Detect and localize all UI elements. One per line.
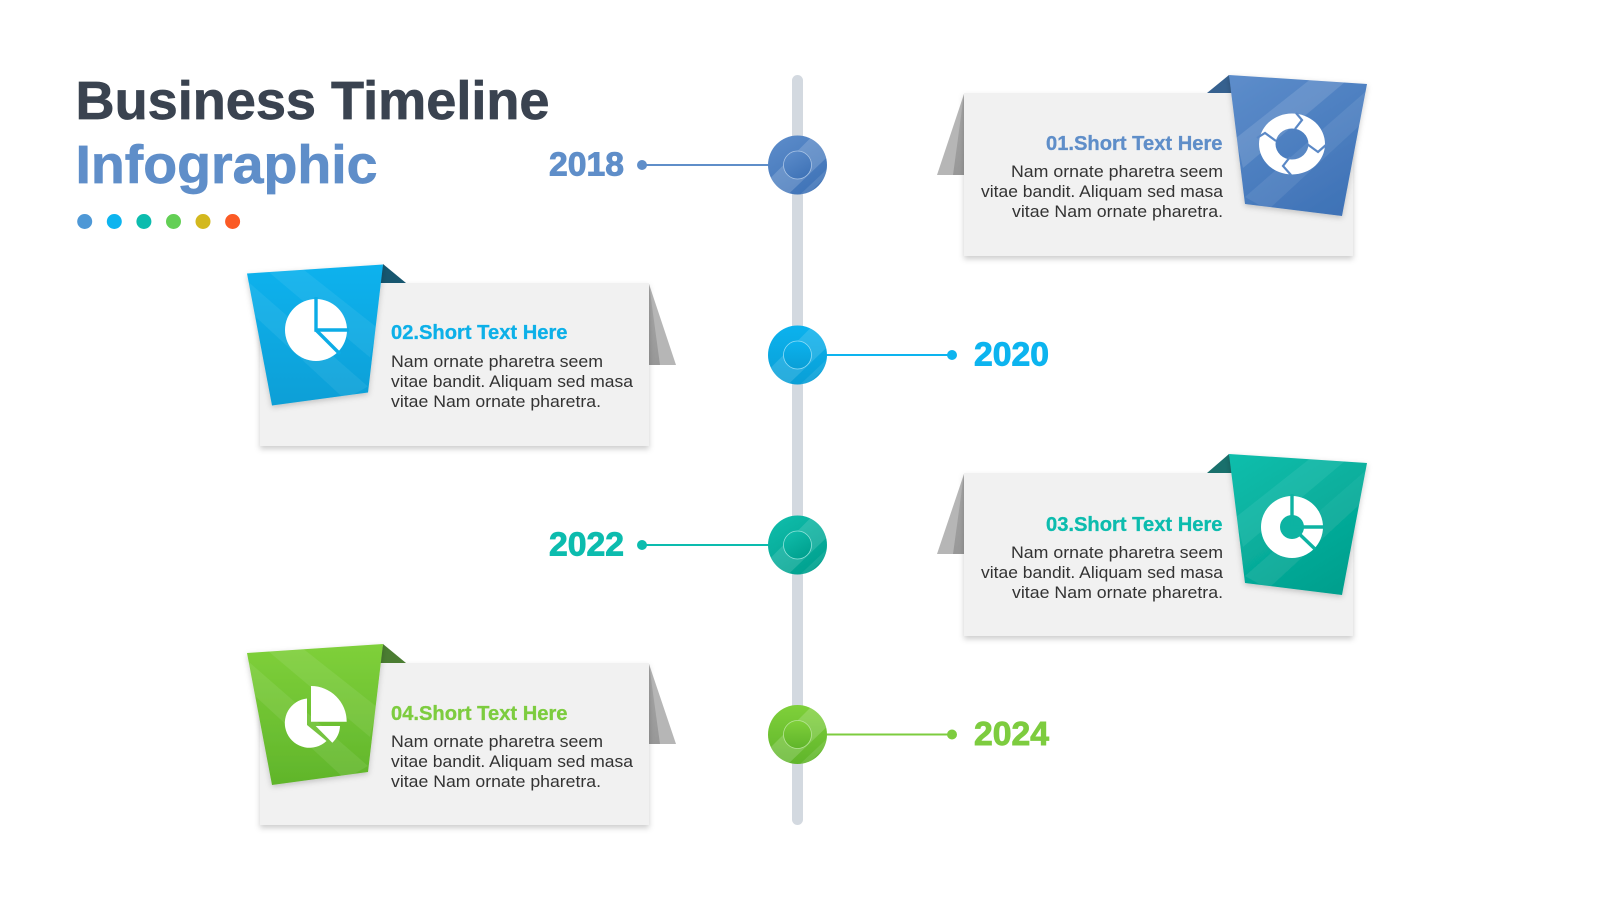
card background 02 <box>260 283 649 446</box>
year 2018 <box>550 136 827 194</box>
body text 01: Nam ornate pharetra seem <box>1011 162 1223 181</box>
panel: card 03 <box>937 454 1372 636</box>
icon: donut chart <box>1261 494 1325 558</box>
tag 04 <box>241 644 383 785</box>
tag fold 04 <box>380 644 406 663</box>
node 2020 <box>768 326 827 384</box>
tag fold 01 <box>1207 75 1233 93</box>
connector 2024 <box>825 730 957 740</box>
body text 02: Nam ornate pharetra seem <box>391 352 603 371</box>
label 2022: 2022 <box>549 526 624 562</box>
node 2024 <box>768 705 827 764</box>
connector 2022 <box>637 540 770 550</box>
connector 2020 <box>825 350 957 360</box>
colour dots <box>77 214 240 229</box>
body text 03 <box>981 543 1224 602</box>
title line 2: Infographic <box>76 135 377 195</box>
icon: cycle ring <box>1257 113 1327 175</box>
paper fold 04 <box>649 664 676 744</box>
connector 2018 <box>637 160 770 170</box>
label 2024: 2024 <box>974 715 1050 752</box>
panel: card 04 <box>241 644 676 825</box>
card background 04 <box>260 663 649 825</box>
tag fold 02 <box>380 264 406 283</box>
year 2022 <box>550 516 827 574</box>
paper fold 01 <box>937 94 964 175</box>
timeline axis <box>792 75 803 825</box>
body text 01: vitae bandit. Aliquam sed masa <box>981 182 1224 201</box>
body text 03: vitae bandit. Aliquam sed masa <box>981 563 1224 582</box>
year 2024 <box>766 702 1050 766</box>
tag fold 03 <box>1207 454 1233 473</box>
label 2020: 2020 <box>974 336 1049 372</box>
body text 02 <box>391 352 634 411</box>
card background 01 <box>964 93 1353 256</box>
node 2022 <box>768 516 827 574</box>
icon: pie chart <box>285 297 349 361</box>
heading 03: 03.Short Text Here <box>1046 513 1222 536</box>
tag 02 <box>241 264 383 406</box>
body text 04: Nam ornate pharetra seem <box>391 732 603 751</box>
body text 01: vitae Nam ornate pharetra. <box>1012 202 1223 221</box>
node 2018 <box>768 136 827 194</box>
card background 03 <box>964 473 1353 636</box>
icon: exploded pie chart <box>285 686 347 748</box>
heading 02: 02.Short Text Here <box>391 321 568 344</box>
body text 04: vitae bandit. Aliquam sed masa <box>391 752 634 771</box>
paper fold 03 <box>937 474 964 554</box>
label 2018: 2018 <box>549 146 624 182</box>
body text 02: vitae Nam ornate pharetra. <box>391 392 601 411</box>
title <box>76 71 550 195</box>
panel: card 01 <box>937 75 1372 256</box>
title line 1: Business Timeline <box>76 71 550 131</box>
body text 02: vitae bandit. Aliquam sed masa <box>391 372 634 391</box>
heading 01: 01.Short Text Here <box>1046 132 1222 155</box>
tag 01 <box>1229 75 1372 216</box>
year 2020 <box>766 323 1049 387</box>
body text 03: Nam ornate pharetra seem <box>1011 543 1223 562</box>
body text 01 <box>981 162 1224 221</box>
body text 04: vitae Nam ornate pharetra. <box>391 772 601 791</box>
heading 04: 04.Short Text Here <box>391 702 568 725</box>
paper fold 02 <box>649 284 676 365</box>
panel: card 02 <box>241 264 676 446</box>
tag 03 <box>1229 454 1372 595</box>
body text 03: vitae Nam ornate pharetra. <box>1012 583 1223 602</box>
body text 04 <box>391 732 634 791</box>
